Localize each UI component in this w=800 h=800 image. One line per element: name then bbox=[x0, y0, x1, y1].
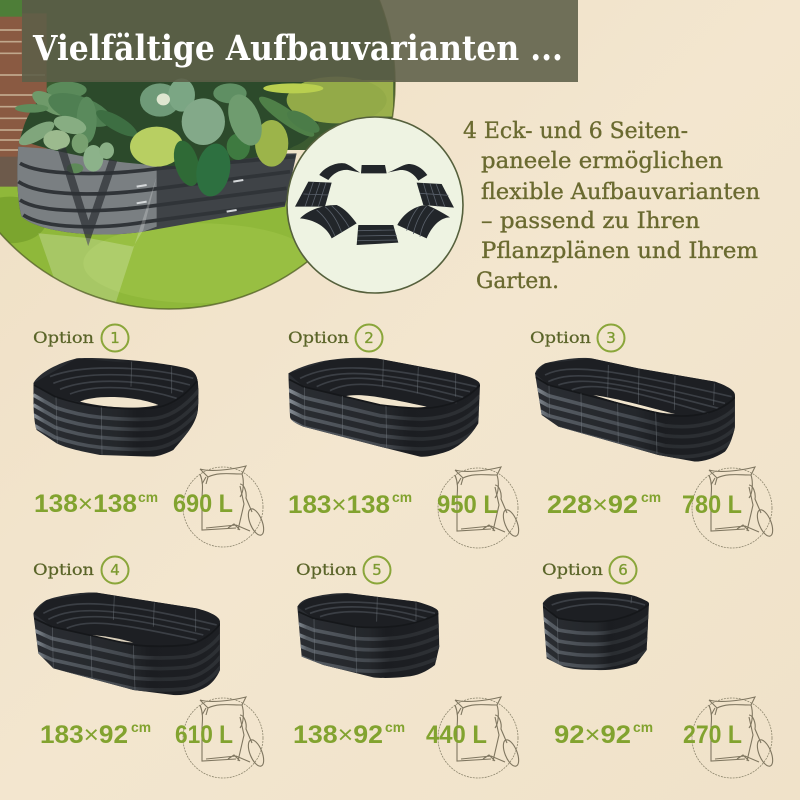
top centre panel bbox=[361, 165, 387, 173]
option 2 dimensions: cm bbox=[392, 489, 412, 505]
option 6 bed bbox=[543, 590, 649, 672]
option 5 soil bag icon bbox=[438, 697, 522, 778]
photo: raised bed with plants on lawn bbox=[0, 0, 410, 320]
option 6 dimensions: cm bbox=[633, 719, 653, 735]
title band bbox=[22, 0, 578, 82]
option 5 bed bbox=[297, 590, 440, 680]
description text: 4 Eck- und 6 Seiten- bbox=[463, 119, 688, 144]
option 4 label: Option bbox=[33, 560, 94, 579]
option 6 bbox=[542, 556, 776, 778]
option 1 label: Option bbox=[33, 328, 94, 347]
description text: flexible Aufbauvarianten bbox=[481, 180, 760, 205]
option 5 dimensions: cm bbox=[385, 719, 405, 735]
option 1 volume: 690 L bbox=[173, 490, 233, 518]
option 5 label: 5 bbox=[372, 561, 382, 579]
option 2 volume: 950 L bbox=[437, 491, 498, 519]
lawn bbox=[0, 0, 400, 320]
option 2 bed bbox=[288, 357, 482, 458]
description text: Garten. bbox=[476, 269, 559, 294]
option 6 dimensions: 92×92 bbox=[554, 721, 631, 749]
option 3 bed bbox=[535, 357, 736, 463]
option 3 bbox=[530, 324, 776, 548]
option 4 bed bbox=[33, 590, 222, 697]
option 2 dimensions: 183×138 bbox=[288, 491, 390, 519]
option 4 dimensions: cm bbox=[131, 719, 151, 735]
option 2 soil bag icon bbox=[438, 467, 522, 548]
option 4 volume: 610 L bbox=[175, 721, 233, 749]
bottom centre panel bbox=[357, 225, 398, 245]
upper left corner panel bbox=[319, 163, 360, 180]
option 3 label: 3 bbox=[606, 329, 616, 347]
option 1 label: 1 bbox=[110, 329, 120, 347]
brick wall bbox=[0, 13, 47, 173]
option 1 dimensions: 138×138 bbox=[34, 490, 137, 518]
option 3 label: Option bbox=[530, 328, 591, 347]
option 1 bed bbox=[33, 357, 200, 458]
option 5 bbox=[293, 556, 522, 778]
description text bbox=[463, 119, 760, 294]
option 5 volume: 440 L bbox=[426, 721, 487, 749]
option 1 dimensions: cm bbox=[138, 489, 158, 505]
photo circle edge bbox=[0, 0, 395, 309]
option 5 dimensions: 138×92 bbox=[293, 721, 383, 749]
description text: Pflanzplänen und Ihrem bbox=[481, 239, 758, 264]
option 6 volume: 270 L bbox=[683, 721, 742, 749]
description text: paneele ermöglichen bbox=[481, 149, 723, 174]
upper right corner panel bbox=[387, 164, 427, 181]
option 5 label: Option bbox=[296, 560, 357, 579]
option 2 label bbox=[288, 324, 382, 352]
plant foliage bbox=[15, 77, 387, 199]
option 3 dimensions: cm bbox=[641, 489, 661, 505]
right side panels bbox=[417, 183, 454, 208]
option 4 dimensions: 183×92 bbox=[40, 721, 128, 749]
option 4 label: 4 bbox=[110, 561, 120, 579]
option 6 label bbox=[542, 556, 636, 584]
option 4 bbox=[33, 556, 267, 778]
option 6 label: 6 bbox=[618, 561, 628, 579]
raised bed in photo bbox=[17, 147, 297, 235]
description text: – passend zu Ihren bbox=[481, 209, 700, 234]
option 2 bbox=[288, 324, 522, 548]
option 4 soil bag icon bbox=[183, 697, 267, 778]
option 2 label: Option bbox=[288, 328, 349, 347]
option 6 label: Option bbox=[542, 560, 603, 579]
lower left corner panel bbox=[300, 205, 357, 238]
option 2 label: 2 bbox=[364, 329, 374, 347]
option 3 dimensions: 228×92 bbox=[547, 491, 638, 519]
lower right corner panel bbox=[397, 205, 450, 238]
option 1 label bbox=[33, 324, 128, 352]
option 1 bbox=[33, 324, 267, 547]
option 3 label bbox=[530, 324, 624, 352]
option 3 soil bag icon bbox=[692, 467, 776, 548]
title: Vielfältige Aufbauvarianten ... bbox=[32, 28, 563, 69]
option 6 soil bag icon bbox=[692, 697, 776, 778]
watermark V bbox=[38, 148, 157, 305]
option 3 volume: 780 L bbox=[682, 491, 742, 519]
option 5 label bbox=[296, 556, 390, 584]
option 1 soil bag icon bbox=[183, 466, 267, 547]
panel parts circle bbox=[287, 117, 463, 293]
option 4 label bbox=[33, 556, 128, 584]
left side panels bbox=[295, 182, 332, 207]
